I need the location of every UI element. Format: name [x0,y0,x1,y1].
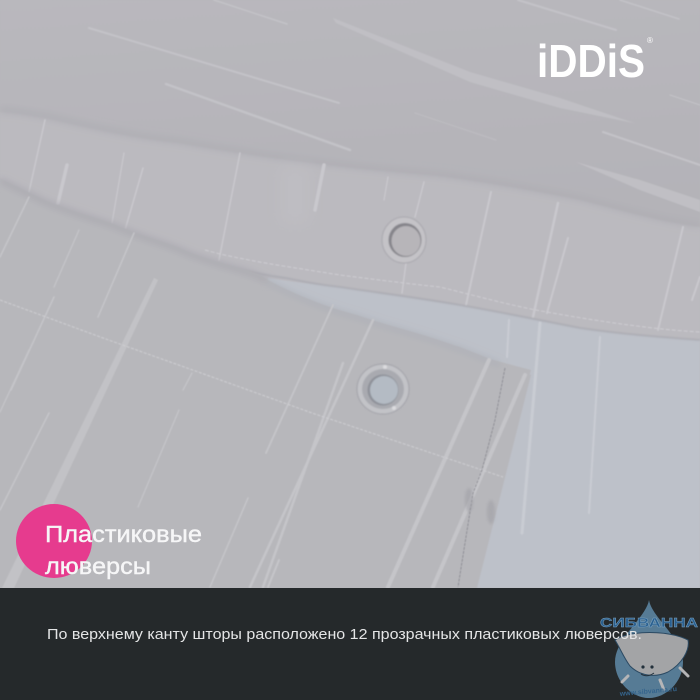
bottom grommet [357,364,409,414]
hem crease shadow [205,260,700,340]
watermark: Sibvanna [600,600,699,698]
bottom dark bar [0,588,700,700]
description text: По верхнему канту шторы расположено 12 прозрачных пластиковых люверсов. [47,626,642,643]
middle hem band [0,110,700,345]
pink circle accent [16,504,92,578]
heading: plastic grommets [45,521,202,579]
heading: plastic grommets: люверсы [45,553,151,579]
brand logo: IDDIS: iDDiS [537,35,645,87]
top grommet [382,217,426,263]
watermark name: СИБВАННА [600,615,699,630]
top fabric fold [0,0,700,240]
heading: plastic grommets: Пластиковые [45,521,202,547]
blue back panel [268,278,700,588]
icon: bathtub [615,632,688,675]
streaks on blue panel [507,320,600,533]
watermark url: www.sibvanna.ru [619,686,677,698]
lower left fabric panel [0,178,531,588]
icon: water drop [615,600,683,698]
tub face [622,665,688,690]
registered mark: ® [647,36,653,45]
